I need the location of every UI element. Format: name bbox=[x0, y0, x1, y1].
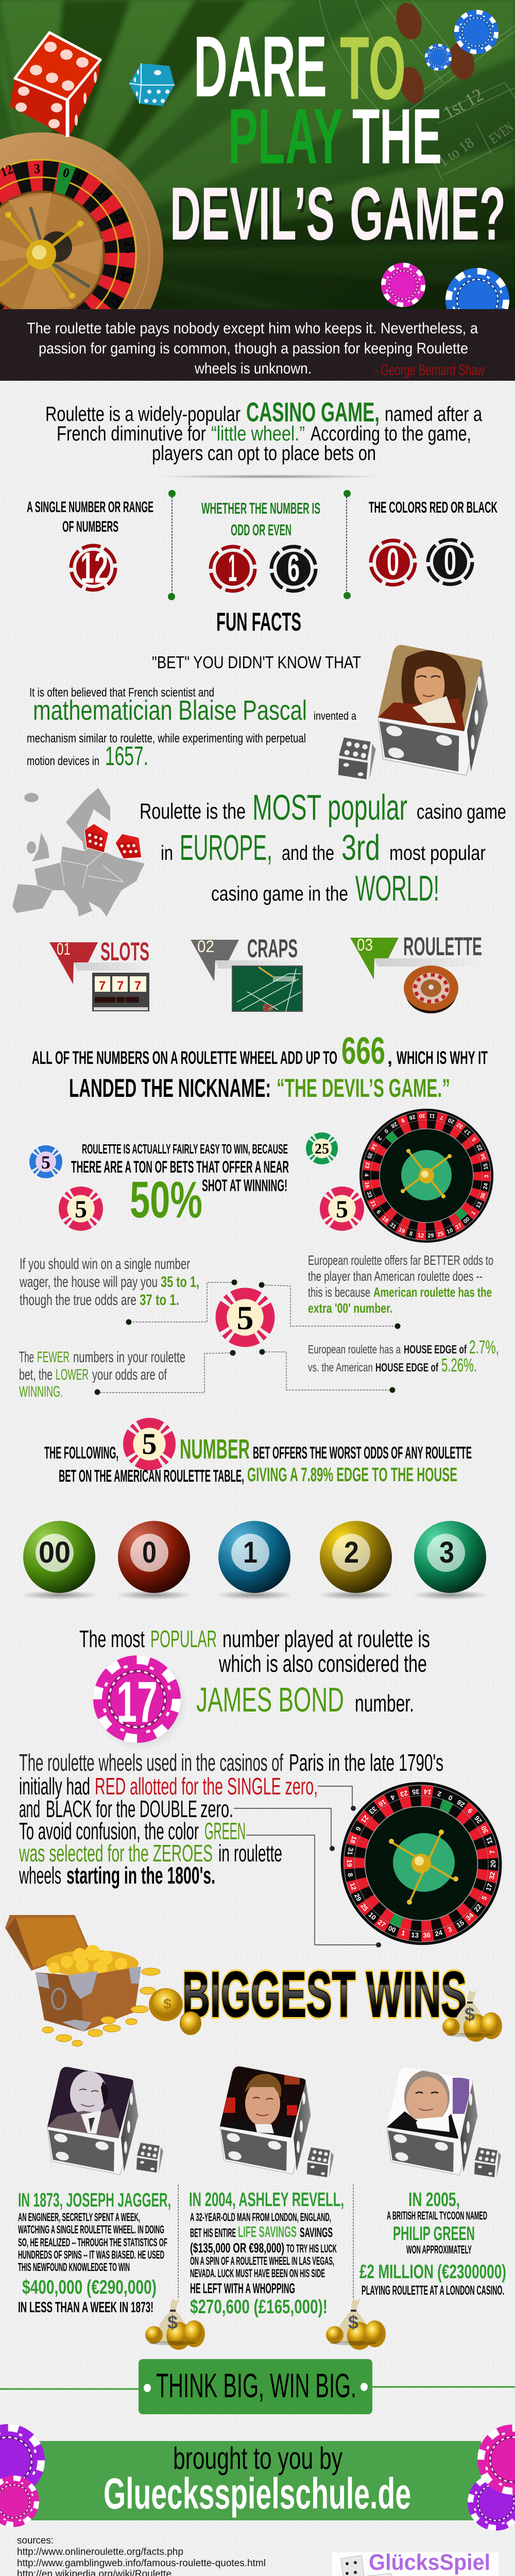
text: 50 percent shot: SHOT AT WINNING! bbox=[202, 1176, 287, 1195]
win: Ashley Revell: ($135,000 OR €98,000) bbox=[190, 2240, 284, 2256]
icon: roulette wheel top view: 10 bbox=[446, 1227, 454, 1235]
text: Paris wheels history: starting in the 1800's. bbox=[66, 1862, 215, 1889]
icon: roulette wheel top view: 35 bbox=[366, 1151, 373, 1160]
text: sources: sources: bbox=[17, 2535, 54, 2546]
icon: roulette wheel top view: 12 bbox=[417, 1232, 424, 1239]
win: Philip Green: IN 2005, bbox=[408, 2189, 460, 2211]
text: sources bbox=[17, 2535, 300, 2576]
win: Ashley Revell: NEVADA. LUCK MUST HAVE BEEN ON HIS SIDE bbox=[190, 2267, 325, 2280]
rank 01: slots: 7 bbox=[117, 979, 124, 993]
text: most popular in Europe: EUROPE, bbox=[180, 827, 272, 868]
bet option: single number bbox=[27, 499, 153, 592]
title: DEVIL’S bbox=[172, 175, 337, 259]
text: five number bet bbox=[44, 1415, 472, 1486]
text: 50 percent shot: 50% bbox=[130, 1171, 202, 1229]
icon: roulette wheel top view: 11 bbox=[429, 1112, 435, 1119]
text: fewer numbers: The bbox=[19, 1349, 34, 1366]
icon: roulette wheel tilted: 21 bbox=[359, 1814, 370, 1824]
icon: roulette wheel top view: 27 bbox=[454, 1222, 463, 1231]
intro text: CASINO GAME, bbox=[246, 397, 380, 428]
text: Paris wheels history: RED allotted for the SINGLE zero, bbox=[95, 1773, 318, 1800]
rank 02: craps: 02 bbox=[197, 937, 214, 956]
connector lines and central 5 chip: 5 bbox=[237, 1299, 253, 1337]
title: DEVIL’S bbox=[170, 172, 335, 256]
icon: roulette wheel top view: 26 bbox=[408, 1113, 416, 1121]
intro text bbox=[45, 397, 483, 479]
icon: roulette wheel tilted: 17 bbox=[484, 1883, 494, 1892]
icon: roulette wheel top view: 18 bbox=[381, 1215, 389, 1224]
icon: roulette wheel top view: 3 bbox=[484, 1175, 490, 1178]
icon: teal die bbox=[129, 63, 175, 106]
icon: roulette wheel top view: 14 bbox=[369, 1142, 378, 1151]
text: house payout: though the true odds are bbox=[20, 1292, 136, 1309]
text: five number bet: 5 bbox=[142, 1427, 157, 1461]
icon: blue 5 chip bbox=[27, 1143, 64, 1180]
icon: money bag left bbox=[145, 2298, 205, 2350]
bet option: odd or even: 6 bbox=[287, 547, 300, 589]
rank 03: roulette: 03 bbox=[357, 936, 373, 954]
icon: money bag right bbox=[326, 2298, 386, 2350]
icon: red 5 chip right: 5 bbox=[336, 1196, 348, 1223]
title: DARE bbox=[194, 18, 327, 115]
rank 02: craps: CRAPS bbox=[247, 934, 298, 963]
icon: roulette wheel top view bbox=[348, 1097, 505, 1255]
text: Blaise Pascal fact: mathematician Blaise Pascal bbox=[33, 695, 307, 726]
icon: roulette wheel tilted: 8 bbox=[346, 1872, 354, 1877]
icon: small gray die bbox=[336, 735, 378, 782]
heading: fun facts: FUN FACTS bbox=[216, 607, 301, 636]
text: most popular in Europe: and the bbox=[282, 842, 334, 865]
column dividers bbox=[168, 490, 351, 600]
text: fewer numbers: LOWER bbox=[56, 1366, 89, 1383]
text: house payout: wager, the house will pay you bbox=[19, 1274, 158, 1291]
icon: roulette wheel top view: 4 bbox=[363, 1173, 369, 1177]
icon: roulette wheel tilted: 4 bbox=[389, 1793, 396, 1802]
icon: roulette wheel tilted bbox=[296, 1737, 515, 1990]
bet option: odd or even: 1 bbox=[228, 547, 237, 589]
text: Paris wheels history: initially had bbox=[19, 1773, 90, 1800]
icon: roulette wheel tilted: 23 bbox=[400, 1789, 408, 1799]
icon: chips right bbox=[468, 2425, 515, 2531]
icon: roulette wheel tilted: 0 bbox=[447, 1793, 454, 1802]
rank 03: roulette bbox=[350, 932, 482, 1013]
connector lines to wheel bbox=[234, 1786, 381, 1947]
icon: roulette wheel tilted: 6 bbox=[354, 1825, 363, 1833]
connector lines and central 5 chip bbox=[95, 1280, 401, 1395]
intro text: “little wheel.” bbox=[211, 422, 305, 445]
icon: green 25 chip: 25 bbox=[315, 1141, 329, 1157]
icon: money bag left: $ bbox=[167, 2312, 178, 2333]
text: Blaise Pascal fact bbox=[27, 653, 361, 771]
banner: think big bbox=[0, 2359, 515, 2414]
text: better odds: this is because bbox=[308, 1284, 370, 1300]
icon: roulette wheel top view: 2 bbox=[376, 1135, 383, 1141]
icon: blue chip small bbox=[425, 44, 452, 71]
ball 00 bbox=[23, 1521, 95, 1593]
icon: chips left bbox=[0, 2424, 45, 2527]
icon: roulette wheel tilted: 7 bbox=[488, 1850, 496, 1855]
text: five number bet: NUMBER bbox=[180, 1434, 250, 1465]
icon: gold coins: $ bbox=[163, 1996, 171, 2012]
text: house edge: HOUSE EDGE of bbox=[404, 1343, 467, 1356]
text: house edge: HOUSE EDGE of bbox=[375, 1361, 438, 1374]
text: Paris wheels history: BLACK for the DOUBLE bbox=[46, 1795, 197, 1822]
ball 2 bbox=[320, 1521, 392, 1593]
text: most popular number: JAMES BOND bbox=[196, 1681, 344, 1719]
roulette table layout: 1 to 18 bbox=[435, 134, 477, 171]
rank 01: slots: 01 bbox=[57, 940, 71, 958]
icon: roulette wheel top view: 17 bbox=[464, 1127, 472, 1136]
ball 1: 1 bbox=[243, 1536, 258, 1569]
win: Joseph Jagger: HUNDREDS OF SPINS -- IT WAS BIASED. HE USED bbox=[18, 2248, 164, 2261]
text: 666 nickname: , bbox=[387, 1048, 392, 1068]
text: Blaise Pascal fact: 1657. bbox=[105, 741, 148, 771]
icon: treasure chest bbox=[5, 1915, 160, 2046]
icon: money bag: $ bbox=[465, 2004, 475, 2025]
icon: roulette wheel top view: 21 bbox=[369, 1199, 377, 1208]
win: Ashley Revell: LIFE SAVINGS bbox=[238, 2224, 297, 2241]
text: 50 percent shot: ROULETTE IS ACTUALLY FAIRLY EASY TO WIN, BECAUSE bbox=[82, 1141, 288, 1157]
die with Jagger portrait bbox=[42, 2064, 140, 2175]
roulette wheel: 27 bbox=[106, 292, 125, 311]
logo: GluecksSpiel Schule: GlücksSpiel bbox=[369, 2550, 490, 2575]
text: most popular number bbox=[79, 1625, 430, 1719]
icon: roulette wheel tilted: 18 bbox=[349, 1835, 358, 1844]
win: Ashley Revell: SAVINGS bbox=[300, 2225, 333, 2240]
bet option: odd or even: ODD OR EVEN bbox=[231, 521, 291, 539]
icon: roulette wheel tilted: 22 bbox=[472, 1903, 483, 1913]
bet option: odd or even: WHETHER THE NUMBER IS bbox=[201, 499, 320, 517]
text: house payout: 37 to 1. bbox=[140, 1292, 179, 1309]
win: Ashley Revell: TO TRY HIS LUCK bbox=[286, 2242, 337, 2255]
icon: roulette wheel tilted: 15 bbox=[455, 1919, 466, 1929]
icon: roulette wheel top view: 33 bbox=[365, 1191, 373, 1198]
icon: roulette wheel tilted: 14 bbox=[423, 1788, 432, 1796]
icon: magenta chip 17: 17 bbox=[116, 1670, 158, 1734]
panel: quote: wheels is unknown. bbox=[194, 360, 312, 377]
icon: roulette wheel top view: 20 bbox=[447, 1116, 455, 1125]
icon: roulette wheel tilted: 27 bbox=[376, 1918, 387, 1929]
text: most popular in Europe: Roulette is the bbox=[140, 799, 246, 824]
rank 02: craps bbox=[191, 934, 304, 1013]
win: Joseph Jagger: WATCHING A SINGLE ROULETTE WHEEL. IN DOING bbox=[18, 2223, 164, 2236]
text: Blaise Pascal fact: invented a bbox=[314, 709, 357, 722]
text: most popular in Europe: 3rd bbox=[341, 827, 380, 868]
text: better odds bbox=[308, 1252, 493, 1316]
text: sources: http://www.gamblingweb.info/famous-roulette-quotes.html bbox=[17, 2558, 266, 2569]
icon: roulette wheel top view: 24 bbox=[482, 1182, 489, 1190]
icon: small die 1 bbox=[135, 2141, 165, 2175]
die with Revell portrait bbox=[215, 2064, 313, 2174]
bet option: colors: 0 bbox=[444, 540, 456, 583]
text: Blaise Pascal fact: mechanism similar to roulette, while experimenting with perpetual bbox=[27, 732, 306, 745]
bet option: colors: 0 bbox=[387, 540, 399, 583]
icon: roulette wheel top view: 13 bbox=[475, 1201, 483, 1209]
panel: quote: The roulette table pays nobody except him who keeps it. Nevertheless, a bbox=[27, 320, 478, 337]
roulette wheel: 34 bbox=[116, 268, 134, 284]
die with Green portrait bbox=[382, 2065, 479, 2175]
text: most popular number: number played at roulette is bbox=[222, 1625, 430, 1652]
text: 666 nickname: LANDED THE NICKNAME: bbox=[69, 1074, 271, 1103]
win: Ashley Revell: $270,600 (£165,000)! bbox=[190, 2296, 328, 2318]
text: most popular number: POPULAR bbox=[150, 1625, 217, 1652]
title: THE bbox=[352, 93, 442, 180]
icon: roulette wheel top view: 32 bbox=[456, 1121, 465, 1130]
text: fewer numbers: numbers in your roulette bbox=[73, 1349, 185, 1366]
icon: magenta chip 17 bbox=[93, 1655, 187, 1751]
text: 666 nickname: 666 bbox=[341, 1029, 385, 1072]
text: fewer numbers bbox=[19, 1349, 185, 1400]
text: Paris wheels history: wheels bbox=[19, 1862, 61, 1889]
text: 50 percent shot bbox=[71, 1141, 289, 1229]
roulette wheel: 3 bbox=[34, 161, 40, 176]
text: Paris wheels history: zero. bbox=[200, 1795, 233, 1822]
text: most popular number: number. bbox=[355, 1690, 414, 1717]
icon: roulette wheel top view: 34 bbox=[479, 1153, 488, 1161]
win: Joseph Jagger: AN ENGINEER, SECRETLY SPENT A WEEK, bbox=[18, 2211, 140, 2224]
rank 01: slots bbox=[49, 937, 152, 1011]
icon: roulette wheel tilted: 1 bbox=[401, 1929, 406, 1937]
bet option: colors bbox=[369, 498, 497, 585]
icon: red 5 chip left bbox=[56, 1184, 106, 1233]
text: fewer numbers: your odds are of bbox=[92, 1366, 167, 1383]
text: most popular number: The most bbox=[79, 1625, 145, 1652]
rank 01: slots: 7 bbox=[134, 979, 141, 993]
icon: roulette wheel tilted: 28 bbox=[456, 1798, 466, 1809]
icon: money bag bbox=[442, 1990, 502, 2042]
icon: roulette wheel tilted: 16 bbox=[377, 1798, 388, 1808]
icon: blue 5 chip: 5 bbox=[41, 1152, 50, 1173]
text: Paris wheels history: The roulette wheels used in the casinos of bbox=[19, 1749, 283, 1776]
text: five number bet: BET ON THE AMERICAN ROULETTE TABLE, bbox=[59, 1466, 244, 1485]
intro text: players can opt to place bets on bbox=[152, 442, 376, 465]
panel: quote: passion for gaming is common, though a passion for keeping Roulette bbox=[39, 340, 468, 357]
rank 02: craps: 68 bbox=[263, 1003, 273, 1013]
icon: roulette wheel top view: 31 bbox=[388, 1222, 397, 1230]
ball 3: 3 bbox=[439, 1536, 454, 1569]
win: Ashley Revell bbox=[189, 2189, 344, 2318]
icon: roulette wheel top view: 23 bbox=[364, 1161, 371, 1169]
icon: roulette wheel top view: 19 bbox=[398, 1227, 406, 1235]
text: Paris wheels history: GREEN bbox=[204, 1818, 246, 1844]
win: Ashley Revell: HE LEFT WITH A WHOPPING bbox=[190, 2280, 295, 2296]
icon: small die 2 bbox=[305, 2146, 335, 2179]
text: Blaise Pascal fact: It is often believed that French scientist and bbox=[29, 686, 214, 700]
win: Joseph Jagger: SO, HE REALIZED -- THROUGH THE STATISTICS OF bbox=[18, 2236, 167, 2249]
text: Paris wheels history: and bbox=[19, 1795, 40, 1822]
win: Ashley Revell: BET HIS ENTIRE bbox=[190, 2226, 236, 2240]
banner: brought to you by bbox=[0, 2424, 515, 2531]
icon: roulette wheel top view: 16 bbox=[364, 1181, 370, 1189]
text: sources: http://www.onlineroulette.org/facts.php bbox=[17, 2547, 183, 2557]
text: most popular in Europe: casino game in the bbox=[211, 883, 348, 905]
banner: brought to you by: brought to you by bbox=[173, 2441, 342, 2476]
win: Joseph Jagger: $400,000 (€290,000) bbox=[22, 2277, 157, 2298]
icon: money bag right: $ bbox=[348, 2312, 358, 2333]
icon: roulette wheel tilted: 33 bbox=[368, 1805, 379, 1816]
icon: blue chip large bbox=[454, 10, 499, 54]
text: Blaise Pascal fact: "BET" YOU DIDN'T KNOW THAT bbox=[152, 653, 361, 672]
title: PLAY bbox=[228, 93, 343, 180]
ball 2: 2 bbox=[344, 1536, 359, 1569]
icon: red die bbox=[10, 32, 100, 137]
text: Paris wheels history: To avoid confusion, the color bbox=[19, 1818, 199, 1844]
text: most popular in Europe: MOST popular bbox=[252, 787, 407, 827]
win: Ashley Revell: IN 2004, ASHLEY REVELL, bbox=[189, 2189, 344, 2211]
icon: roulette wheel top view: 9 bbox=[400, 1117, 405, 1124]
roulette table layout bbox=[319, 0, 515, 181]
icon: roulette wheel tilted: 5 bbox=[480, 1894, 489, 1902]
icon: roulette wheel tilted: 2 bbox=[437, 1790, 442, 1798]
text: house edge: vs. the American bbox=[308, 1361, 373, 1374]
text: house payout: If you should win on a single number bbox=[20, 1256, 190, 1273]
icon: roulette wheel tilted: 24 bbox=[434, 1928, 443, 1938]
text: Paris wheels history: was selected for the ZEROES bbox=[19, 1840, 213, 1867]
icon: roulette wheel tilted: 12 bbox=[348, 1882, 358, 1891]
icon: roulette wheel top view: 6 bbox=[375, 1209, 382, 1215]
roulette wheel bbox=[0, 132, 163, 309]
icon: roulette wheel top view: 1 bbox=[470, 1210, 477, 1216]
text: fewer numbers: WINNING. bbox=[19, 1383, 63, 1400]
icon: roulette wheel top view: 36 bbox=[479, 1192, 487, 1200]
icon: roulette wheel top view: 25 bbox=[437, 1230, 444, 1238]
text: Paris wheels history bbox=[19, 1749, 443, 1889]
text: Blaise Pascal fact: motion devices in bbox=[27, 754, 99, 768]
icon: roulette wheel tilted: 19 bbox=[346, 1859, 353, 1867]
icon: roulette wheel tilted: 9 bbox=[466, 1807, 474, 1815]
icon: roulette wheel top view: 00 bbox=[462, 1216, 471, 1225]
win: Ashley Revell: A 32-YEAR-OLD MAN FROM LONDON, ENGLAND, bbox=[190, 2211, 331, 2224]
icon: roulette wheel top view: 0 bbox=[383, 1128, 389, 1134]
icon: roulette wheel top view: 28 bbox=[390, 1121, 399, 1129]
icon: roulette wheel tilted: 3 bbox=[447, 1925, 453, 1934]
icon: roulette wheel top view: 22 bbox=[475, 1143, 484, 1152]
win: Joseph Jagger: IN LESS THAN A WEEK IN 1873! bbox=[18, 2299, 153, 2316]
rank 01: slots: SLOTS bbox=[100, 937, 149, 966]
numbered balls bbox=[21, 1521, 489, 1600]
icon: roulette wheel top view: 29 bbox=[427, 1232, 434, 1239]
text: better odds: extra '00' number. bbox=[308, 1300, 392, 1316]
bet option: odd or even bbox=[201, 499, 320, 591]
panel: quote bbox=[0, 309, 515, 381]
icon: roulette wheel tilted: 20 bbox=[489, 1860, 497, 1868]
win: Joseph Jagger: THIS NEWFOUND KNOWLEDGE TO WIN bbox=[18, 2261, 130, 2274]
icon: roulette wheel tilted: 25 bbox=[359, 1902, 370, 1913]
rank 01: slots: 7 bbox=[99, 979, 106, 993]
icon: red 5 chip left: 5 bbox=[75, 1196, 87, 1223]
roulette wheel: 19 bbox=[94, 185, 114, 205]
icon: die with Pascal portrait bbox=[372, 642, 490, 775]
intro text: Roulette is a widely-popular bbox=[45, 403, 241, 426]
icon: roulette wheel top view: 7 bbox=[439, 1114, 444, 1121]
text: fewer numbers: FEWER bbox=[37, 1349, 70, 1366]
icon: roulette wheel top view: 8 bbox=[408, 1230, 413, 1238]
ball 1 bbox=[218, 1521, 290, 1593]
text: most popular in Europe: most popular bbox=[389, 842, 486, 865]
text: 666 nickname bbox=[32, 1029, 488, 1103]
icon: roulette wheel tilted: 34 bbox=[464, 1911, 475, 1922]
bet option: single number: 12 bbox=[80, 544, 108, 592]
title: TO bbox=[340, 18, 406, 118]
icon: roulette wheel tilted: 26 bbox=[473, 1814, 484, 1825]
text: Paris wheels history: in roulette bbox=[218, 1840, 282, 1867]
win: Ashley Revell: ON A SPIN OF A ROULETTE WHEEL IN LAS VEGAS, bbox=[190, 2255, 334, 2267]
icon: roulette wheel top view: 15 bbox=[483, 1163, 489, 1170]
icon: green 25 chip bbox=[304, 1131, 339, 1166]
title bbox=[170, 18, 508, 259]
win: Philip Green bbox=[359, 2189, 506, 2298]
intro text: French diminutive for bbox=[57, 422, 206, 445]
icon: roulette wheel tilted: 13 bbox=[411, 1931, 419, 1939]
intro text: named after a bbox=[385, 403, 483, 426]
icon: roulette wheel tilted: 31 bbox=[346, 1847, 355, 1856]
map of Europe bbox=[12, 788, 145, 917]
win: Joseph Jagger: IN 1873, JOSEPH JAGGER, bbox=[18, 2190, 171, 2211]
ball 0 bbox=[118, 1521, 190, 1593]
text: house edge: 5.26%. bbox=[441, 1354, 477, 1376]
bet option: single number: A SINGLE NUMBER OR RANGE bbox=[27, 499, 153, 516]
text: most popular in Europe: in bbox=[161, 842, 173, 865]
icon: gold coins bbox=[149, 1988, 201, 2035]
roulette wheel: 32 bbox=[71, 167, 89, 187]
icon: roulette wheel tilted: 29 bbox=[353, 1892, 363, 1903]
text: house payout: 35 to 1, bbox=[161, 1274, 199, 1291]
roulette table layout: 1st 12 bbox=[440, 84, 487, 123]
icon: magenta chip bbox=[381, 263, 425, 307]
icon: red 5 chip right bbox=[317, 1184, 367, 1233]
win: Joseph Jagger bbox=[18, 2190, 171, 2316]
banner: think big: THINK BIG, WIN BIG. bbox=[156, 2366, 356, 2404]
roulette wheel: 21 bbox=[112, 209, 130, 227]
icon: roulette wheel tilted: 10 bbox=[367, 1911, 377, 1922]
ball 00: 00 bbox=[39, 1536, 71, 1569]
text: five number bet: THE FOLLOWING, bbox=[44, 1443, 118, 1462]
text: most popular in Europe: WORLD! bbox=[355, 868, 439, 908]
text: 50 percent shot: THERE ARE A TON OF BETS THAT OFFER A NEAR bbox=[71, 1158, 289, 1176]
icon: roulette wheel tilted: 32 bbox=[488, 1871, 496, 1880]
icon: roulette wheel tilted: 35 bbox=[411, 1788, 420, 1796]
text: fewer numbers: bet, the bbox=[19, 1366, 53, 1383]
column dividers wins bbox=[178, 2184, 353, 2298]
roulette wheel: 0 bbox=[61, 165, 72, 181]
hero background bbox=[0, 0, 515, 309]
icon: roulette wheel top view: 30 bbox=[419, 1112, 425, 1119]
ball 3 bbox=[414, 1521, 486, 1593]
ball 0: 0 bbox=[142, 1536, 157, 1569]
bet option: single number: OF NUMBERS bbox=[62, 518, 118, 535]
text: most popular number: which is also considered the bbox=[218, 1650, 427, 1677]
icon: roulette wheel tilted: 36 bbox=[423, 1931, 431, 1939]
text: most popular in Europe bbox=[140, 787, 506, 908]
icon: roulette wheel tilted: 30 bbox=[479, 1824, 490, 1835]
icon: roulette wheel tilted: 00 bbox=[387, 1924, 397, 1934]
icon: roulette wheel top view: 5 bbox=[471, 1136, 478, 1142]
text: house edge bbox=[308, 1336, 499, 1376]
roulette wheel: 25 bbox=[122, 241, 138, 254]
icon: blue chip bottom bbox=[445, 268, 509, 309]
text: house payout bbox=[19, 1256, 199, 1309]
icon: small die 3 bbox=[473, 2146, 503, 2179]
icon: roulette wheel tilted: 11 bbox=[485, 1836, 494, 1845]
text: house edge: European roulette has a bbox=[308, 1343, 401, 1356]
